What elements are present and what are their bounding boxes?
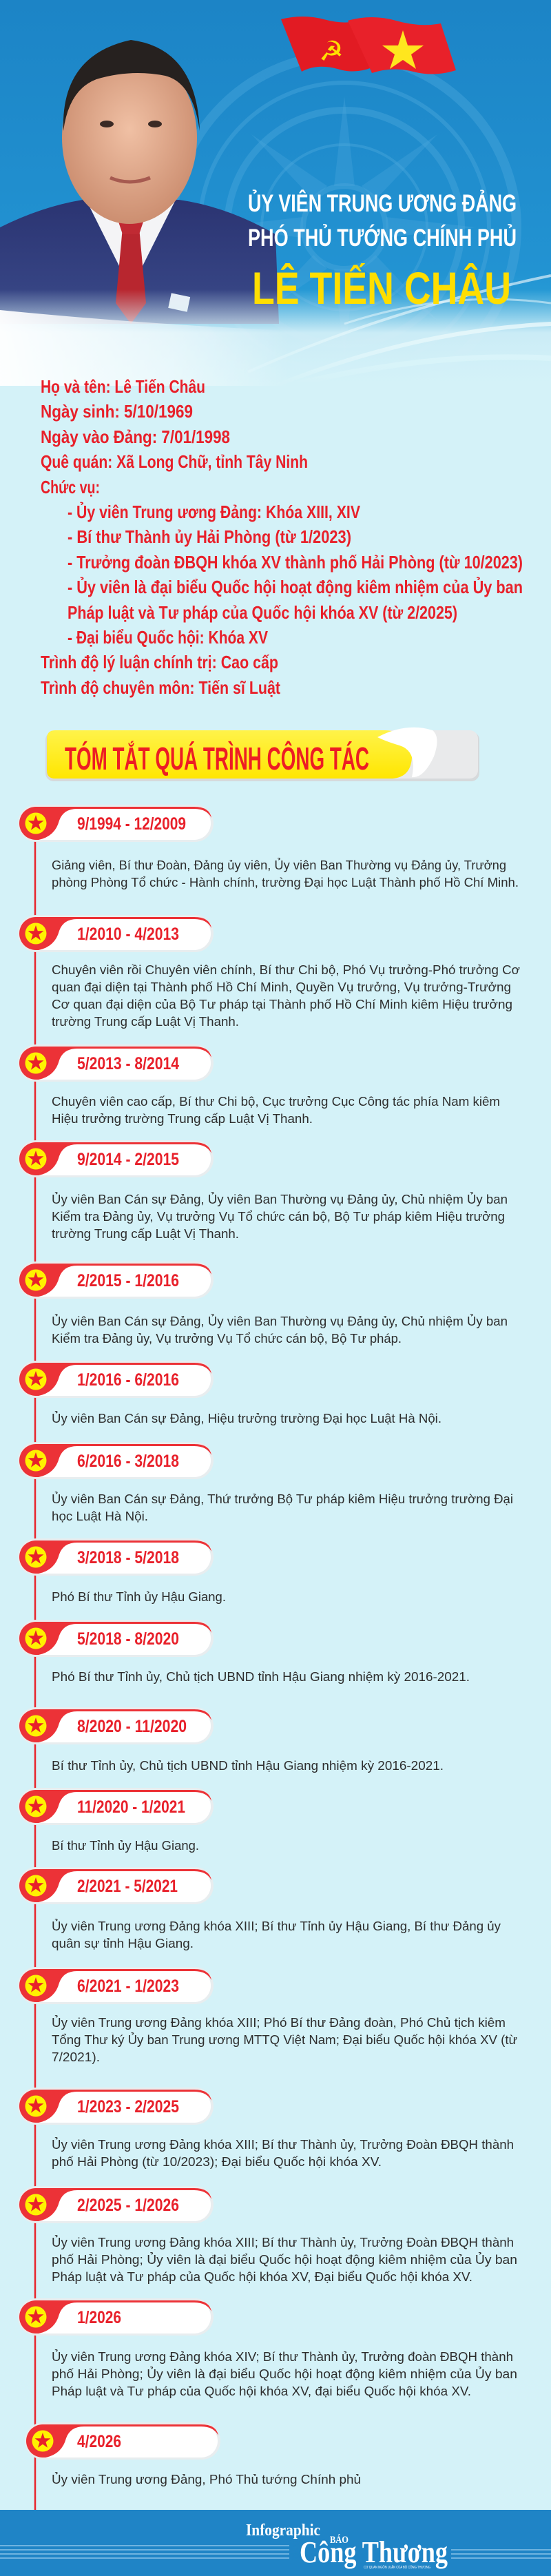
timeline item 17: Ủy viên Trung ương Đảng, Phó Thủ tướng Chính phủ xyxy=(52,2472,361,2486)
timeline item 12 xyxy=(18,1867,501,1950)
timeline item 12: Ủy viên Trung ương Đảng khóa XIII; Bí thư Tỉnh ủy Hậu Giang, Bí thư Đảng ủy xyxy=(52,1919,501,1933)
personal info: - Đại biểu Quốc hội: Khóa XV xyxy=(67,627,269,648)
timeline item 6: 1/2016 - 6/2016 xyxy=(77,1370,179,1390)
timeline item 4 xyxy=(18,1140,508,1241)
timeline item 3: Chuyên viên cao cấp, Bí thư Chi bộ, Cục trưởng Cục Công tác phía Nam kiêm xyxy=(52,1095,500,1109)
flag: party and national: ☭ xyxy=(319,36,344,68)
personal info: - Bí thư Thành ủy Hải Phòng (từ 1/2023) xyxy=(67,526,351,547)
personal info: Ngày sinh: 5/10/1969 xyxy=(41,401,193,422)
footer: Infographic xyxy=(246,2522,320,2539)
timeline item 13 xyxy=(18,1967,517,2064)
timeline item 7: 6/2016 - 3/2018 xyxy=(77,1452,179,1471)
timeline line xyxy=(34,827,36,2510)
timeline item 1: phòng Phòng Tổ chức - Hành chính, trường Đại học Luật Thành phố Hồ Chí Minh. xyxy=(52,876,519,889)
timeline item 2: quan đại diện tại Thành phố Hồ Chí Minh, Quyền Vụ trưởng, Vụ trưởng-Trưởng xyxy=(52,980,511,994)
timeline item 14 xyxy=(18,2088,514,2169)
personal info: - Ủy viên Trung ương Đảng: Khóa XIII, XIV xyxy=(67,501,361,522)
timeline item 1 xyxy=(18,805,519,889)
timeline item 2: 1/2010 - 4/2013 xyxy=(77,925,179,944)
timeline item 9: Phó Bí thư Tỉnh ủy, Chủ tịch UBND tỉnh Hậu Giang nhiệm kỳ 2016-2021. xyxy=(52,1670,470,1684)
timeline item 4: Ủy viên Ban Cán sự Đảng, Ủy viên Ban Thường vụ Đảng ủy, Chủ nhiệm Ủy ban xyxy=(52,1192,508,1206)
timeline item 4: trường Trung cấp Luật Vị Thanh. xyxy=(52,1227,239,1241)
timeline item 12: 2/2021 - 5/2021 xyxy=(77,1877,178,1896)
timeline item 14: 1/2023 - 2/2025 xyxy=(77,2097,179,2116)
timeline item 5: 2/2015 - 1/2016 xyxy=(77,1271,179,1290)
timeline item 13: 6/2021 - 1/2023 xyxy=(77,1977,179,1996)
header background xyxy=(0,0,551,400)
timeline item 7: học Luật Hà Nội. xyxy=(52,1509,148,1523)
timeline item 15: phố Hải Phòng; Ủy viên là đại biểu Quốc hội hoạt động kiêm nhiệm của Ủy ban xyxy=(52,2252,517,2267)
section banner xyxy=(45,728,479,781)
timeline item 5 xyxy=(18,1261,508,1346)
timeline item 16: 1/2026 xyxy=(77,2308,121,2327)
title xyxy=(248,189,517,313)
timeline item 11: 11/2020 - 1/2021 xyxy=(77,1797,185,1817)
timeline item 2 xyxy=(18,915,520,1029)
timeline item 6: Ủy viên Ban Cán sự Đảng, Hiệu trưởng trường Đại học Luật Hà Nội. xyxy=(52,1411,441,1425)
timeline item 15: Pháp luật và Tư pháp của Quốc hội khóa XV, Đại biểu Quốc hội khóa XV. xyxy=(52,2270,472,2284)
timeline item 4: 9/2014 - 2/2015 xyxy=(77,1150,179,1169)
timeline item 17 xyxy=(25,2422,361,2486)
footer: BÁO xyxy=(330,2534,349,2546)
personal info: Chức vụ: xyxy=(41,477,100,497)
timeline item 7 xyxy=(18,1442,513,1523)
timeline item 5: Kiểm tra Đảng ủy, Vụ trưởng Vụ Tổ chức cán bộ, Bộ Tư pháp. xyxy=(52,1332,402,1346)
personal info: Ngày vào Đảng: 7/01/1998 xyxy=(41,426,230,447)
personal info: Pháp luật và Tư pháp của Quốc hội khóa XV (từ 2/2025) xyxy=(67,602,457,623)
timeline item 1: Giảng viên, Bí thư Đoàn, Đảng ủy viên, Ủy viên Ban Thường vụ Đảng ủy, Trưởng xyxy=(52,858,506,872)
portrait xyxy=(0,40,279,324)
timeline item 13: Ủy viên Trung ương Đảng khóa XIII; Phó Bí thư Đảng đoàn, Phó Chủ tịch kiêm xyxy=(52,2015,506,2030)
footer: Công Thương xyxy=(300,2535,448,2569)
timeline item 8 xyxy=(18,1538,226,1604)
timeline item 15: 2/2025 - 1/2026 xyxy=(77,2196,179,2215)
personal info: Quê quán: Xã Long Chữ, tỉnh Tây Ninh xyxy=(41,451,308,472)
timeline item 13: 7/2021). xyxy=(52,2050,100,2064)
timeline item 6 xyxy=(18,1361,441,1425)
timeline item 2: Cơ quan đại diện của Bộ Tư pháp tại Thành phố Hồ Chí Minh kiêm Hiệu trưởng xyxy=(52,998,512,1011)
timeline item 13: Tổng Thư ký Ủy ban Trung ương MTTQ Việt Nam; Đại biểu Quốc hội khóa XV (từ xyxy=(52,2032,517,2047)
timeline item 3: 5/2013 - 8/2014 xyxy=(77,1054,179,1073)
timeline item 8: 3/2018 - 5/2018 xyxy=(77,1548,179,1567)
timeline item 14: phố Hải Phòng (từ 10/2023); Đại biểu Quốc hội khóa XV. xyxy=(52,2155,382,2169)
timeline item 5: Ủy viên Ban Cán sự Đảng, Ủy viên Ban Thường vụ Đảng ủy, Chủ nhiệm Ủy ban xyxy=(52,1314,508,1328)
timeline item 16: Pháp luật và Tư pháp của Quốc hội khóa XV, đại biểu Quốc hội khóa XV. xyxy=(52,2384,471,2398)
personal info: Họ và tên: Lê Tiến Châu xyxy=(41,376,205,397)
personal info: Trình độ lý luận chính trị: Cao cấp xyxy=(41,652,278,672)
timeline item 10 xyxy=(18,1707,444,1773)
timeline item 10: Bí thư Tỉnh ủy, Chủ tịch UBND tỉnh Hậu Giang nhiệm kỳ 2016-2021. xyxy=(52,1759,444,1773)
footer: CƠ QUAN NGÔN LUẬN CỦA BỘ CÔNG THƯƠNG xyxy=(364,2565,430,2570)
header waves and fade xyxy=(0,276,551,386)
personal info: Trình độ chuyên môn: Tiến sĩ Luật xyxy=(41,677,280,698)
timeline item 16: Ủy viên Trung ương Đảng khóa XIV; Bí thư Thành ủy, Trưởng đoàn ĐBQH thành xyxy=(52,2349,513,2364)
timeline item 12: quân sự tỉnh Hậu Giang. xyxy=(52,1937,194,1950)
footer xyxy=(0,2510,551,2576)
timeline item 9: 5/2018 - 8/2020 xyxy=(77,1629,179,1649)
timeline item 16: phố Hải Phòng; Ủy viên là đại biểu Quốc hội hoạt động kiêm nhiệm của Ủy ban xyxy=(52,2367,517,2381)
timeline item 17: 4/2026 xyxy=(77,2432,121,2451)
flag: party and national xyxy=(281,17,456,74)
timeline item 10: 8/2020 - 11/2020 xyxy=(77,1717,187,1736)
timeline item 15: Ủy viên Trung ương Đảng khóa XIII; Bí thư Thành ủy, Trưởng Đoàn ĐBQH thành xyxy=(52,2235,514,2249)
timeline item 8: Phó Bí thư Tỉnh ủy Hậu Giang. xyxy=(52,1590,226,1604)
timeline item 3 xyxy=(18,1044,500,1126)
timeline item 15 xyxy=(18,2186,517,2284)
timeline item 16 xyxy=(18,2298,517,2398)
timeline item 9 xyxy=(18,1620,470,1684)
timeline item 1: 9/1994 - 12/2009 xyxy=(77,814,186,834)
timeline item 4: Kiểm tra Đảng ủy, Vụ trưởng Vụ Tổ chức cán bộ, Bộ Tư pháp kiêm Hiệu trưởng xyxy=(52,1210,505,1224)
timeline item 14: Ủy viên Trung ương Đảng khóa XIII; Bí thư Thành ủy, Trưởng Đoàn ĐBQH thành xyxy=(52,2137,514,2152)
personal info xyxy=(41,376,523,698)
timeline item 2: Chuyên viên rồi Chuyên viên chính, Bí thư Chi bộ, Phó Vụ trưởng-Phó trưởng Cơ xyxy=(52,963,520,977)
timeline item 3: Hiệu trưởng trường Trung cấp Luật Vị Thanh. xyxy=(52,1112,313,1126)
timeline item 7: Ủy viên Ban Cán sự Đảng, Thứ trưởng Bộ Tư pháp kiêm Hiệu trưởng trường Đại xyxy=(52,1492,513,1506)
timeline item 11: Bí thư Tỉnh ủy Hậu Giang. xyxy=(52,1839,199,1853)
timeline item 2: trường Trung cấp Luật Vị Thanh. xyxy=(52,1015,239,1029)
timeline item 11 xyxy=(18,1788,214,1853)
